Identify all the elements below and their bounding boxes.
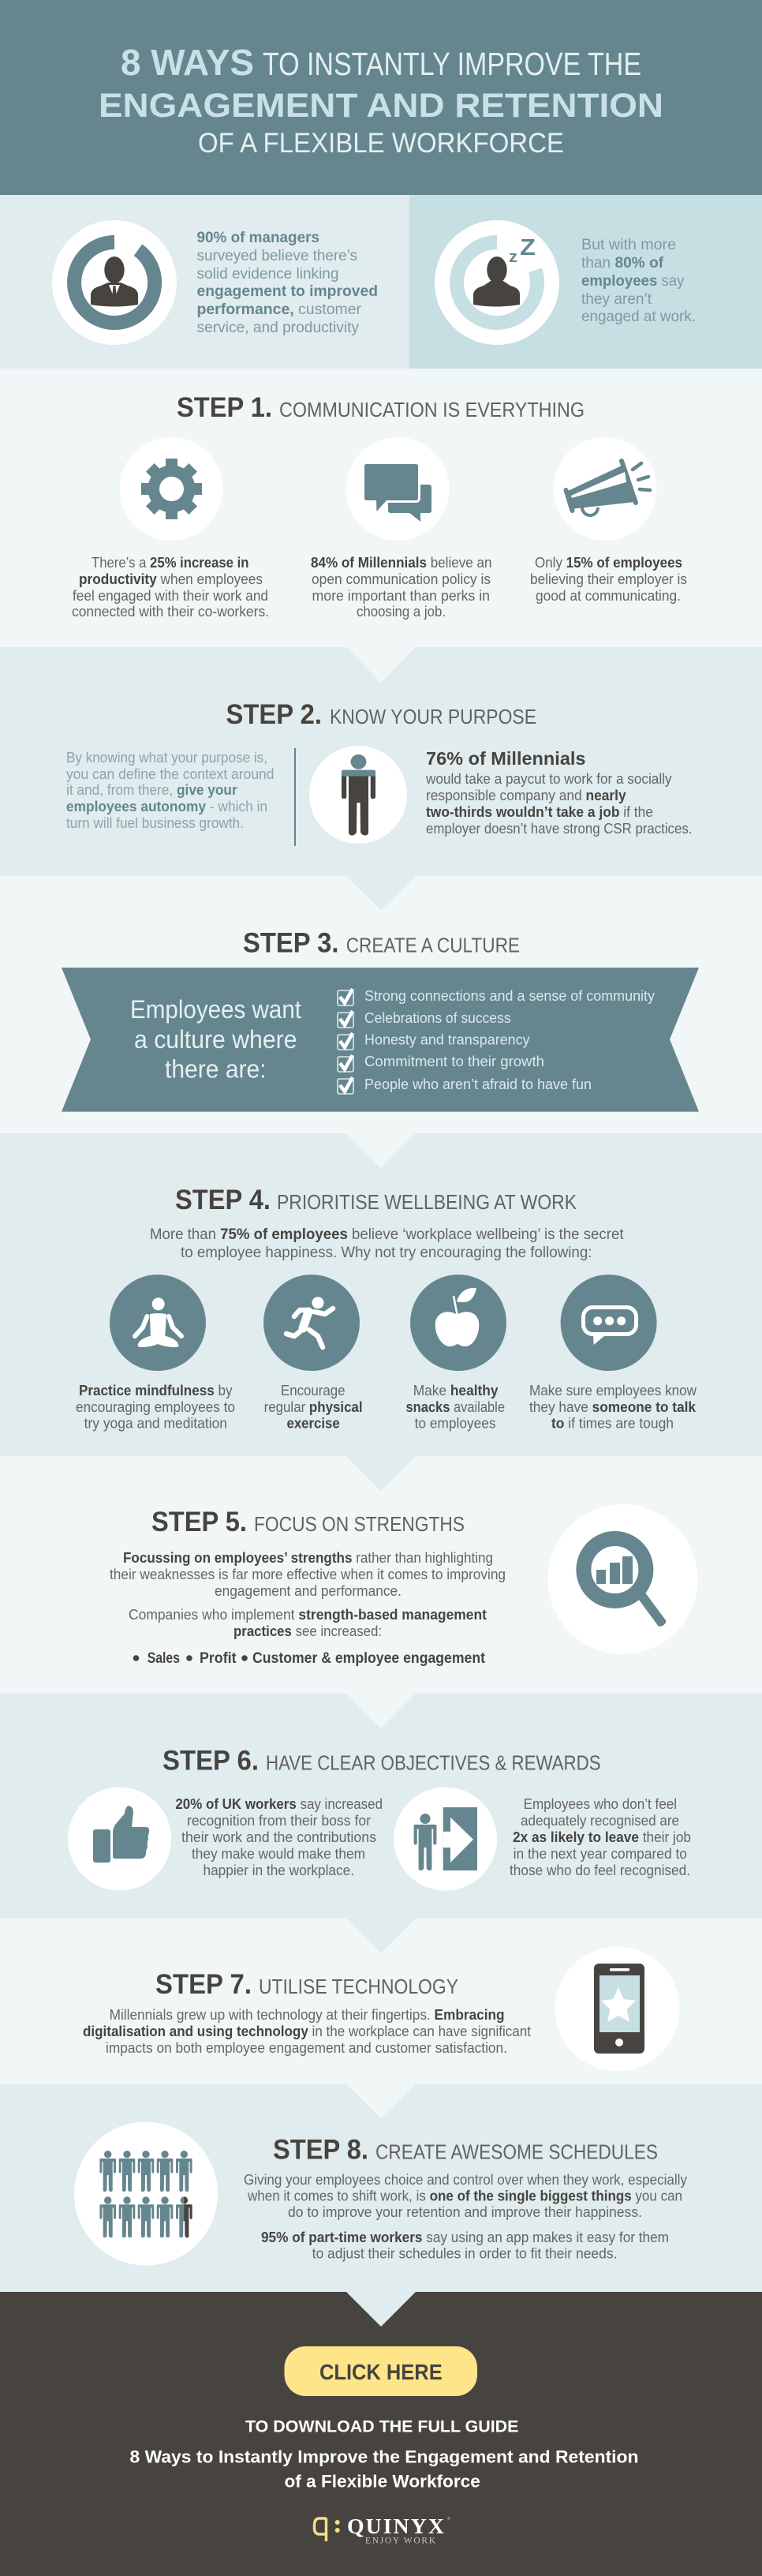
text: mindfulness: Practice mindfulness by	[79, 1383, 232, 1398]
logo: quinyx: QUINYX	[347, 2514, 446, 2538]
text: communicating stat: believing their employer is	[530, 571, 687, 587]
icon: manager donut	[52, 220, 177, 345]
panel: step 4	[0, 1133, 762, 1456]
heading: step 4: STEP 4.	[175, 1185, 271, 1215]
text: likely to leave stat: in the next year compared to	[514, 1846, 687, 1862]
checklist	[338, 988, 655, 1094]
text: download guide: of a Flexible Workforce	[284, 2472, 480, 2492]
text: schedules	[244, 2172, 687, 2262]
icon: magnifier with chart	[547, 1504, 697, 1654]
title: OF A FLEXIBLE WORKFORCE	[198, 128, 564, 159]
arrow: step 3 to 4	[346, 1133, 416, 1168]
text: exercise: Encourage	[281, 1383, 346, 1398]
text: managers stat: service, and productivity	[197, 320, 359, 336]
icon: gear	[120, 437, 222, 541]
text: exercise: exercise	[287, 1416, 340, 1432]
heading: step 8	[273, 2135, 658, 2166]
text: culture lead: there are:	[165, 1055, 267, 1084]
panel: intro employees	[409, 195, 762, 369]
heading: step 1: STEP 1.	[177, 392, 272, 423]
text: snacks: snacks available	[405, 1399, 505, 1415]
text: communicating stat	[530, 555, 687, 604]
icon: chat bubbles	[346, 437, 450, 541]
panel: step 7	[0, 1919, 762, 2084]
arrow: step 6 to 7	[346, 1919, 416, 1953]
checklist: Strong connections and a sense of community	[364, 988, 655, 1004]
heading: step 2: STEP 2.	[226, 699, 322, 730]
text: strengths: Companies who implement strength-based management	[129, 1607, 487, 1623]
panel: step 8	[0, 2084, 762, 2292]
text: purpose: By knowing what your purpose is,	[66, 750, 267, 766]
heading: step 7: STEP 7.	[155, 1969, 252, 2000]
text: 76% of millennials: would take a paycut to work for a socially	[425, 771, 672, 787]
heading: step 6	[162, 1746, 601, 1776]
text: strengths: Focussing on employees’ strengths rather than highlighting	[123, 1550, 493, 1566]
text: millennials stat: 84% of Millennials believe an	[311, 555, 492, 571]
text: productivity stat: feel engaged with their work and	[73, 588, 268, 604]
title	[99, 42, 663, 159]
checklist: Commitment to their growth	[364, 1054, 544, 1069]
text: snacks: to employees	[415, 1416, 495, 1432]
title: TO INSTANTLY IMPROVE THE	[263, 46, 641, 82]
panel: header	[0, 0, 762, 195]
heading: step 4	[175, 1185, 577, 1215]
heading: step 3: CREATE A CULTURE	[346, 934, 520, 957]
heading: step 7	[155, 1969, 458, 2000]
text: technology: digitalisation and using technology in the workplace can have significant	[83, 2024, 531, 2039]
text: recognition stat: their work and the contributions	[181, 1829, 376, 1845]
text: culture lead: Employees want	[130, 995, 301, 1024]
heading: step 8: CREATE AWESOME SCHEDULES	[375, 2140, 658, 2164]
text: 76% of millennials: two-thirds wouldn’t take a job if the	[426, 804, 653, 820]
text: managers stat: 90% of managers	[197, 230, 319, 246]
text: recognition stat: they make would make them	[192, 1846, 365, 1862]
checklist: People who aren’t afraid to have fun	[364, 1076, 592, 1092]
heading: step 7: UTILISE TECHNOLOGY	[259, 1975, 458, 1998]
list: increased outcomes: Sales	[148, 1650, 180, 1667]
text: likely to leave stat: Employees who don’t feel	[524, 1796, 677, 1812]
icon: runner	[263, 1275, 360, 1371]
banner: culture	[62, 968, 699, 1112]
list: increased outcomes	[133, 1650, 486, 1667]
logo: quinyx	[314, 2514, 450, 2546]
text: communicating stat: Only 15% of employees	[535, 555, 682, 571]
text: technology: Millennials grew up with technology at their fingertips. Embracing	[110, 2007, 505, 2023]
text: recognition stat: happier in the workplace.	[204, 1863, 354, 1878]
text: employees stat	[581, 237, 696, 325]
text: managers stat: engagement to improved	[197, 283, 378, 300]
heading: step 6: STEP 6.	[162, 1746, 259, 1776]
icon: group of people	[74, 2122, 218, 2266]
text: download guide: TO DOWNLOAD THE FULL GUIDE	[245, 2418, 518, 2436]
arrow: step 8 to footer	[346, 2292, 416, 2327]
text: exercise: regular physical	[264, 1399, 363, 1415]
text: mindfulness	[76, 1383, 235, 1432]
text: schedules: do to improve your retention and improve their happiness.	[288, 2204, 642, 2220]
text: productivity stat	[72, 555, 269, 620]
arrow: step 7 to 8	[346, 2084, 416, 2118]
text: productivity stat: productivity when employees	[79, 571, 263, 587]
text: likely to leave stat: 2x as likely to leave their job	[513, 1829, 691, 1845]
panel: footer	[0, 2292, 762, 2576]
checklist: Honesty and transparency	[364, 1032, 530, 1048]
text: recognition stat: 20% of UK workers say increased	[175, 1796, 383, 1812]
logo: quinyx: ®	[447, 2516, 450, 2522]
text: managers stat: solid evidence linking	[197, 266, 339, 283]
heading: step 5: STEP 5.	[151, 1507, 247, 1537]
icon: sleeping employee donut: z	[509, 249, 517, 266]
panel: step 5	[0, 1456, 762, 1694]
heading: step 2	[226, 699, 536, 730]
text: purpose: turn will fuel business growth.	[66, 815, 244, 831]
text: someone to talk to: they have someone to talk	[529, 1399, 697, 1415]
text: managers stat: performance, customer	[197, 301, 362, 318]
panel: step 1	[0, 369, 762, 647]
text: technology	[83, 2007, 531, 2056]
checklist: Celebrations of success	[364, 1010, 511, 1026]
list: increased outcomes: Profit	[200, 1650, 237, 1667]
text: snacks: Make healthy	[413, 1383, 499, 1398]
heading: step 3: STEP 3.	[243, 928, 339, 959]
text: productivity stat: connected with their co-workers.	[72, 604, 269, 620]
text: purpose: it and, from there, give your	[66, 782, 237, 798]
arrow: step 5 to 6	[346, 1694, 416, 1728]
arrow: step 2 to 3	[346, 876, 416, 910]
heading: step 8: STEP 8.	[273, 2135, 368, 2166]
text: recognition stat	[175, 1796, 383, 1878]
text: employees stat: than 80% of	[581, 255, 664, 271]
icon: sleeping employee donut	[435, 220, 559, 345]
text: millennials stat: open communication policy is	[312, 571, 491, 587]
text: purpose: employees autonomy - which in	[66, 799, 267, 814]
text: 76% of millennials: responsible company and nearly	[426, 788, 626, 803]
text: employees stat: employees say	[581, 273, 685, 290]
text: recognition stat: recognition from their boss for	[187, 1813, 371, 1829]
icon: thumbs up	[68, 1787, 171, 1891]
text: productivity stat: There’s a 25% increase in	[92, 555, 249, 571]
list: increased outcomes: Customer & employee engagement	[252, 1650, 486, 1667]
arrow: step 4 to 5	[346, 1456, 416, 1491]
text: likely to leave stat: adequately recognised are	[521, 1813, 679, 1829]
text: likely to leave stat	[510, 1796, 691, 1878]
icon: talk bubble	[561, 1275, 657, 1371]
heading: step 6: HAVE CLEAR OBJECTIVES & REWARDS	[266, 1750, 601, 1774]
text: schedules: to adjust their schedules in order to fit their needs.	[312, 2246, 617, 2262]
button: click here	[284, 2346, 477, 2396]
text: snacks	[405, 1383, 505, 1432]
text: mindfulness: encouraging employees to	[76, 1399, 235, 1415]
text: wellbeing intro: More than 75% of employees believe ‘workplace wellbeing’ is the secret	[150, 1226, 624, 1243]
icon: megaphone	[554, 437, 656, 541]
icon: apple	[410, 1275, 506, 1371]
icon: smartphone	[555, 1946, 680, 2071]
panel: intro managers	[0, 195, 409, 369]
icon: person leaving door	[394, 1787, 497, 1891]
text: mindfulness: try yoga and meditation	[84, 1416, 227, 1432]
text: schedules: when it comes to shift work, is one of the single biggest things you can	[247, 2188, 682, 2203]
icon: person	[309, 746, 407, 844]
text: strengths: practices see increased:	[233, 1623, 382, 1639]
text: someone to talk to: to if times are tough	[551, 1416, 674, 1432]
heading: step 1	[177, 392, 585, 423]
text: managers stat: surveyed believe there’s	[197, 248, 357, 264]
text: culture lead	[130, 995, 301, 1084]
heading: step 5	[151, 1507, 465, 1537]
text: purpose: you can define the context around	[66, 766, 275, 782]
text: schedules: Giving your employees choice and control over when they work, especially	[244, 2172, 687, 2188]
text: millennials stat	[311, 555, 492, 620]
text: someone to talk to: Make sure employees know	[529, 1383, 697, 1398]
text: technology: impacts on both employee engagement and customer satisfaction.	[106, 2040, 507, 2056]
text: communicating stat: good at communicating.	[536, 588, 681, 604]
icon: sleeping employee donut: Z	[520, 235, 536, 260]
logo: quinyx: ENJOY WORK	[365, 2537, 436, 2546]
text: employees stat: they aren’t	[581, 291, 652, 308]
text: 76% of millennials: 76% of Millennials	[426, 748, 585, 769]
title: ENGAGEMENT AND RETENTION	[99, 87, 663, 125]
text: 76% of millennials: employer doesn’t have strong CSR practices.	[426, 821, 692, 837]
text: download guide: 8 Ways to Instantly Improve the Engagement and Retention	[129, 2447, 639, 2467]
panel: step 3	[0, 876, 762, 1133]
arrow: step 1 to 2	[346, 647, 416, 683]
heading: step 2: KNOW YOUR PURPOSE	[330, 705, 536, 728]
text: strengths: their weaknesses is far more effective when it comes to improving	[110, 1567, 506, 1582]
heading: step 1: COMMUNICATION IS EVERYTHING	[279, 398, 585, 421]
panel: step 2	[0, 647, 762, 876]
heading: step 3	[243, 928, 520, 959]
text: purpose	[66, 750, 275, 831]
text: download guide	[129, 2418, 639, 2492]
text: strengths	[110, 1550, 506, 1639]
button: click here: CLICK HERE	[319, 2360, 443, 2384]
text: employees stat: engaged at work.	[581, 309, 696, 325]
panel: step 6	[0, 1694, 762, 1919]
text: millennials stat: choosing a job.	[357, 604, 446, 620]
title: 8 WAYS	[121, 42, 254, 83]
text: employees stat: But with more	[581, 237, 676, 253]
heading: step 4: PRIORITISE WELLBEING AT WORK	[277, 1190, 577, 1214]
text: exercise	[264, 1383, 363, 1432]
text: culture lead: a culture where	[134, 1025, 297, 1054]
text: wellbeing intro	[150, 1226, 624, 1261]
text: someone to talk to	[529, 1383, 697, 1432]
text: wellbeing intro: to employee happiness. Why not try encouraging the following:	[181, 1245, 592, 1261]
text: managers stat	[197, 230, 378, 336]
icon: meditation	[110, 1275, 206, 1371]
heading: step 5: FOCUS ON STRENGTHS	[254, 1512, 465, 1536]
text: strengths: engagement and performance.	[215, 1583, 402, 1599]
text: millennials stat: more important than perks in	[312, 588, 490, 604]
text: schedules: 95% of part-time workers say using an app makes it easy for them	[261, 2230, 669, 2245]
text: 76% of millennials	[425, 748, 692, 837]
text: likely to leave stat: those who do feel recognised.	[510, 1863, 690, 1878]
